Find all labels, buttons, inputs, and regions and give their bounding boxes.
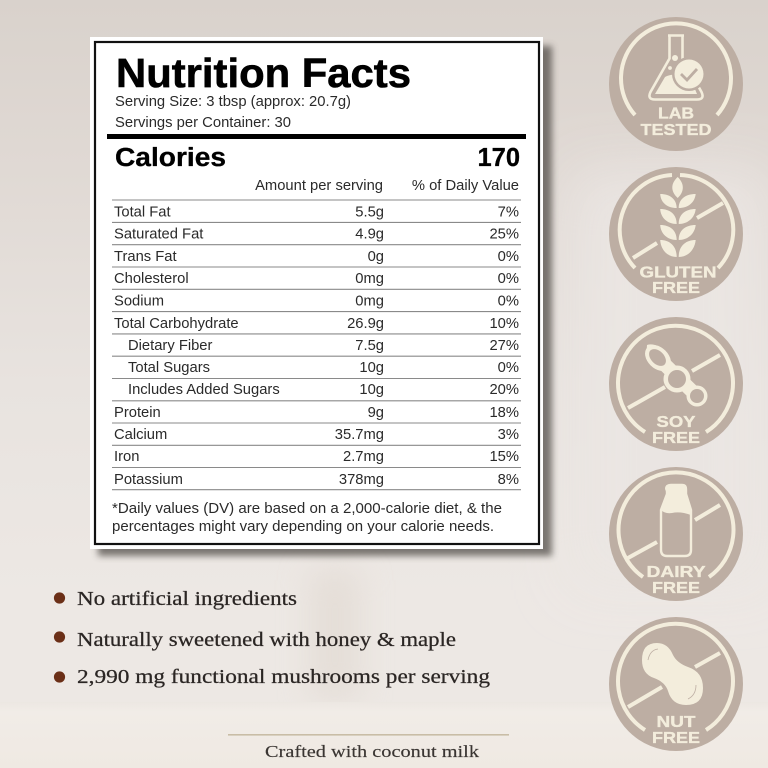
nutrient table: 27% <box>489 338 519 354</box>
icon: flask <box>649 36 706 100</box>
badge: lab tested <box>609 17 743 151</box>
badge: nut free <box>609 617 743 751</box>
nutrient table: 35.7mg <box>335 427 384 443</box>
thick rule <box>107 134 526 139</box>
bullet: no artificial ingredients: No artificial ingredients <box>77 588 297 610</box>
nutrient table: 10g <box>359 382 384 398</box>
column headers <box>255 178 519 194</box>
nutrient table: 25% <box>489 227 519 243</box>
nutrient table: 15% <box>489 449 519 465</box>
icon: peanut <box>642 643 703 705</box>
nutrient table: 0% <box>498 271 519 287</box>
nutrient table: 10g <box>359 360 384 376</box>
badge: gluten free: GLUTEN <box>640 264 716 282</box>
badge: dairy free: FREE <box>652 580 700 597</box>
nutrient table: Total Sugars <box>128 360 210 376</box>
nutrient table: 7.5g <box>355 338 384 354</box>
nutrient table: Saturated Fat <box>114 227 203 243</box>
nutrient table: Dietary Fiber <box>128 338 213 354</box>
badge: dairy free: DAIRY <box>646 564 706 581</box>
badge: soy free <box>609 317 743 451</box>
nutrient table: 18% <box>489 405 519 421</box>
nutrient table: Total Fat <box>114 204 171 220</box>
calories: Calories <box>115 144 226 172</box>
footnote: percentages might vary depending on your calorie needs. <box>112 519 494 535</box>
nutrient table: Sodium <box>114 294 164 310</box>
badge: lab tested: LAB <box>658 106 694 122</box>
nutrient table <box>112 200 521 490</box>
nutrient table: 3% <box>498 427 519 443</box>
bullet: naturally sweetened: Naturally sweetened with honey & maple <box>77 629 456 651</box>
nutrient table: Iron <box>114 449 139 465</box>
bullet: functional mushrooms: 2,990 mg functional mushrooms per serving <box>77 666 490 688</box>
calories: 170 <box>477 144 520 172</box>
nutrient table: 378mg <box>339 472 384 488</box>
footnote: *Daily values (DV) are based on a 2,000-calorie diet, & the <box>112 501 502 517</box>
footer line and tagline: Crafted with coconut milk <box>265 742 480 761</box>
column headers: % of Daily Value <box>412 178 519 194</box>
title: Nutrition Facts <box>116 50 411 96</box>
nutrient table: 4.9g <box>355 227 384 243</box>
icon: wheat <box>660 177 696 257</box>
panel card <box>90 37 543 549</box>
nutrient table: 0mg <box>355 294 384 310</box>
nutrient table: Total Carbohydrate <box>114 316 239 332</box>
badge: dairy free <box>609 467 743 601</box>
nutrient table: Cholesterol <box>114 271 189 287</box>
icon: milk bottle <box>661 484 691 556</box>
nutrient table: Calcium <box>114 427 167 443</box>
serving size: Serving Size: 3 tbsp (approx: 20.7g) <box>115 94 351 110</box>
nutrient table: 0% <box>498 360 519 376</box>
badge: lab tested: TESTED <box>640 122 712 139</box>
nutrient table: Trans Fat <box>114 249 177 265</box>
nutrient table: Potassium <box>114 472 183 488</box>
panel shadow <box>98 46 552 556</box>
badge: nut free: FREE <box>652 730 700 747</box>
feature bullets <box>54 588 490 688</box>
nutrient table: 0% <box>498 249 519 265</box>
badge: nut free: NUT <box>656 714 696 731</box>
badge: gluten free <box>609 167 743 301</box>
badge: soy free: SOY <box>656 414 696 431</box>
nutrient table: 0g <box>368 249 384 265</box>
nutrient table: Includes Added Sugars <box>128 382 280 398</box>
nutrient table: 0% <box>498 294 519 310</box>
calories <box>115 144 520 172</box>
servings per container: Servings per Container: 30 <box>115 115 291 131</box>
nutrient table: 2.7mg <box>343 449 384 465</box>
nutrient table: 9g <box>368 405 384 421</box>
badge: soy free: FREE <box>652 430 700 447</box>
nutrient table: 7% <box>498 204 519 220</box>
nutrient table: 5.5g <box>355 204 384 220</box>
nutrient table: Protein <box>114 405 161 421</box>
footnote <box>112 501 502 535</box>
column headers: Amount per serving <box>255 178 383 194</box>
nutrient table: 10% <box>489 316 519 332</box>
nutrient table: 26.9g <box>347 316 384 332</box>
badge: gluten free: FREE <box>652 280 700 297</box>
nutrient table: 20% <box>489 382 519 398</box>
icon: soybean pod <box>640 340 708 406</box>
nutrition facts panel <box>90 37 552 556</box>
panel border <box>95 42 539 544</box>
nutrient table: 0mg <box>355 271 384 287</box>
nutrient table: 8% <box>498 472 519 488</box>
